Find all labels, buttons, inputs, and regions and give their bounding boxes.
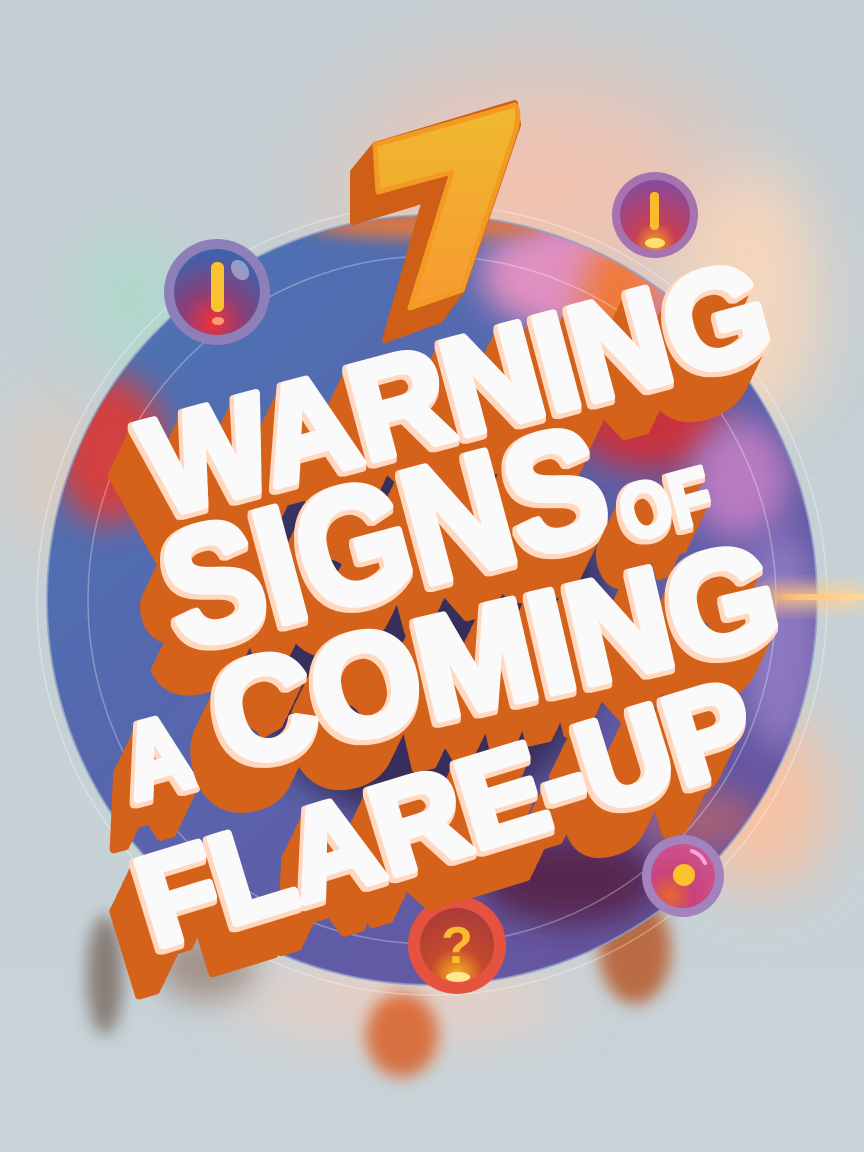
light flare at right edge — [740, 586, 864, 608]
icon: dot badge bottom right — [642, 835, 724, 917]
7 face — [375, 105, 518, 308]
7 extrusion — [353, 103, 518, 340]
disc rings — [37, 205, 827, 995]
title: WARNING: WARNING — [128, 232, 786, 546]
cast shadows below the disc — [87, 896, 671, 1077]
icon: question badge bottom: ? — [441, 917, 473, 975]
big number 7 — [353, 103, 518, 340]
title: OF: OF — [610, 450, 721, 558]
title: A: A — [111, 692, 205, 822]
title: COMING: COMING — [197, 511, 793, 798]
panel: glowing disc — [37, 205, 827, 995]
icon: question badge bottom — [408, 896, 506, 994]
icon: exclamation badge top right — [612, 172, 698, 258]
icon: exclamation badge left — [164, 239, 270, 345]
title: SIGNS: SIGNS — [143, 390, 626, 684]
title: FLARE-UP: FLARE-UP — [121, 652, 770, 975]
